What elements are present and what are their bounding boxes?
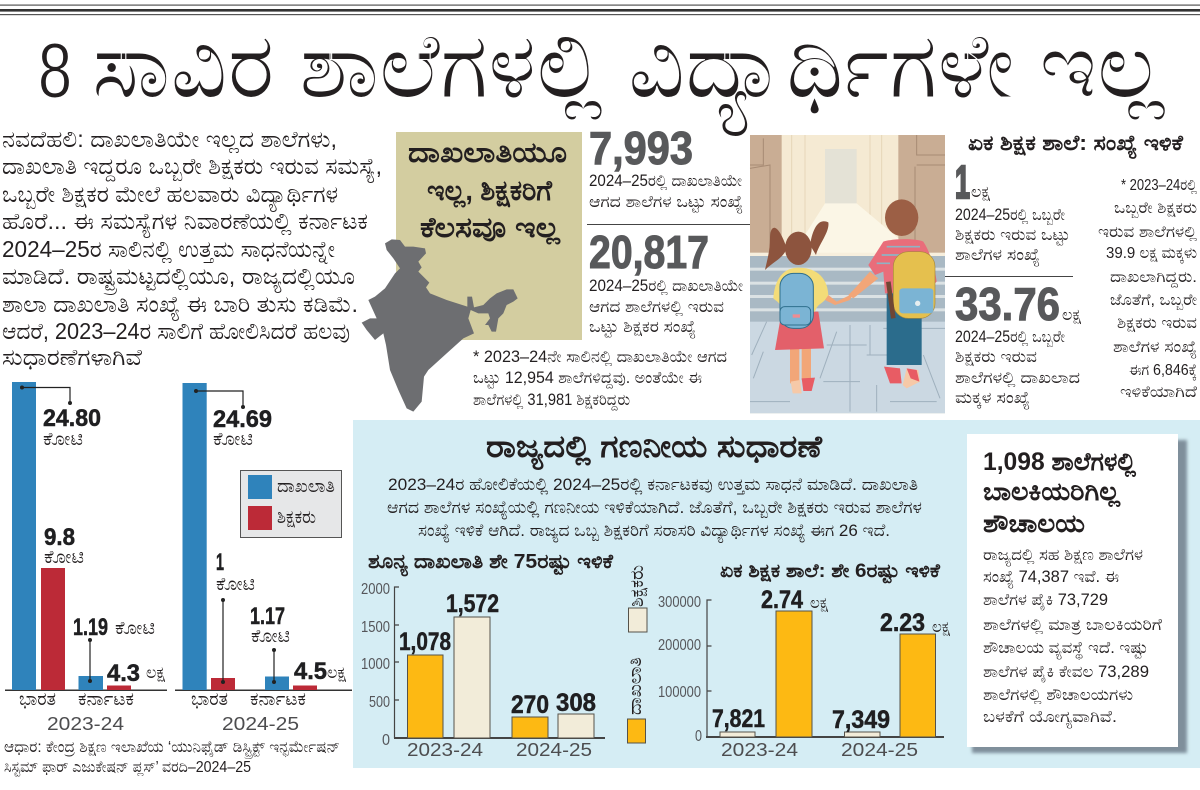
category and year labels: 2023-24 <box>47 714 124 734</box>
footnote: 2023-24 zero enrolment: ಒಟ್ಟು 12,954 ಶಾಲೆಗಳಿದ್ದವು. ಅಂತೆಯೇ ಈ <box>473 369 703 389</box>
callout body: ಶಾಲೆಗಳ ಪೈಕಿ 73,729 <box>983 591 1108 610</box>
chart: national and state enrolment and teachers <box>5 382 352 734</box>
stat: teachers in zero enrolment schools: ಆಗದ ಶಾಲೆಗಳಲ್ಲಿ ಇರುವ <box>589 298 724 317</box>
value labels 2024-25: 4.5 <box>294 658 327 685</box>
stat: 1 lakh schools: ಶಾಲೆಗಳ ಸಂಖ್ಯೆ <box>955 246 1040 266</box>
value labels 2023-24: ಲಕ್ಷ <box>146 663 166 683</box>
intro text block: ಒಬ್ಬರೇ ಶಿಕ್ಷಕರ ಮೇಲೆ ಹಲವಾರು ವಿದ್ಯಾರ್ಥಿಗಳ <box>2 181 338 212</box>
side note: 2023-24 single teacher schools: ಜೊತೆಗೆ, ಒಬ್ಬರೇ <box>1110 292 1197 310</box>
category and year labels: ಕರ್ನಾಟಕ <box>78 689 134 709</box>
legend: enrolment and teachers <box>240 470 342 538</box>
intro text block: ಮಾಡಿದೆ. ರಾಷ್ಟ್ರಮಟ್ಟದಲ್ಲಿಯೂ, ರಾಜ್ಯದಲ್ಲಿಯೂ <box>2 263 355 295</box>
side note: 2023-24 single teacher schools: ಶಾಲೆಗಳ ಸಂಖ್ಯೆ <box>1113 339 1197 358</box>
icon: india map <box>362 239 518 412</box>
bars <box>720 611 936 737</box>
value labels 2024-25: ಕೋಟಿ <box>216 574 255 594</box>
intro text block: ಆದರೆ, 2023–24ರ ಸಾಲಿಗೆ ಹೋಲಿಸಿದರೆ ಹಲವು <box>2 318 350 344</box>
callout body <box>983 546 1162 728</box>
stat: teachers in zero enrolment schools: ಒಟ್ಟು ಶಿಕ್ಷಕರ ಸಂಖ್ಯೆ <box>589 318 696 338</box>
callout heading <box>983 448 1137 538</box>
stat: 1 lakh schools: 2024–25ರಲ್ಲಿ ಒಬ್ಬರೇ <box>955 206 1065 225</box>
stat: 1 lakh schools <box>955 156 1070 266</box>
value labels <box>712 586 950 734</box>
panel heading: ರಾಜ್ಯದಲ್ಲಿ ಗಣನೀಯ ಸುಧಾರಣೆ <box>486 429 823 470</box>
category and year labels: 2024-25 <box>222 714 299 734</box>
value labels 2023-24: 24.80 <box>43 405 101 432</box>
panel: girls toilets callout <box>967 434 1187 753</box>
year labels: 2024-25 <box>841 740 918 760</box>
title: 8 <box>38 26 72 114</box>
panel: no enrolment heading box <box>396 132 582 340</box>
intro text block <box>2 126 382 370</box>
callout body: ರಾಜ್ಯದಲ್ಲಿ ಸಹ ಶಿಕ್ಷಣ ಶಾಲೆಗಳ <box>983 546 1143 566</box>
side note: 2023-24 single teacher schools: ಇರುವ ಶಾಲೆಗಳಲ್ಲಿ <box>1098 224 1197 242</box>
panel paragraph: ಆಗದ ಶಾಲೆಗಳ ಸಂಖ್ಯೆಯಲ್ಲಿ ಗಣನೀಯ ಇಳಿಕೆಯಾಗಿದೆ. ಜೊತೆಗೆ, ಒಬ್ಬರೇ ಶಿಕ್ಷಕರು ಇರುವ ಶಾಲೆಗಳ <box>387 498 922 520</box>
value labels 2023-24: 1.19 <box>73 614 108 641</box>
y axis: 1500 <box>361 619 390 636</box>
callout heading: 1,098 ಶಾಲೆಗಳಲ್ಲಿ <box>983 448 1137 478</box>
side note: 2023-24 single teacher schools: ಶಿಕ್ಷಕರು ಇರುವ <box>1117 315 1197 332</box>
legend: vertical chart key: ಶಿಕ್ಷಕರು <box>627 565 648 607</box>
leader lines <box>20 386 276 684</box>
value labels: 308 <box>556 689 596 717</box>
source note: ಸಿಸ್ಟಮ್ ಫಾರ್ ಎಜುಕೇಷನ್ ಪ್ಲಸ್’ ವರದಿ–2024–25 <box>4 759 251 777</box>
value labels 2023-24: ಕೋಟಿ <box>44 547 84 567</box>
value labels 2023-24 <box>43 405 166 687</box>
stat: zero enrolment schools: ಆಗದ ಶಾಲೆಗಳ ಒಟ್ಟು ಸಂಖ್ಯೆ <box>589 193 743 213</box>
year labels: 2023-24 <box>721 740 798 760</box>
girl <box>765 221 853 393</box>
y axis: 2000 <box>361 581 390 598</box>
value labels: 1,572 <box>446 590 499 618</box>
stat: 1 lakh schools: ಶಿಕ್ಷಕರು ಇರುವ ಒಟ್ಟು <box>955 226 1070 246</box>
callout body: ಶಾಲೆಗಳ ಪೈಕಿ ಕೇವಲ 73,289 <box>983 663 1149 682</box>
side note: 2023-24 single teacher schools: 39.9 ಲಕ್ಷ ಮಕ್ಕಳು <box>1106 245 1197 263</box>
intro text block: ಹೊರೆ... ಈ ಸಮಸ್ಯೆಗಳ ನಿವಾರಣೆಯಲ್ಲಿ ಕರ್ನಾಟಕ <box>2 208 368 238</box>
intro text block: 2024–25ರ ಸಾಲಿನಲ್ಲಿ ಉತ್ತಮ ಸಾಧನೆಯನ್ನೇ <box>2 236 335 264</box>
stat: 33.76 lakh children <box>955 278 1082 409</box>
value labels 2024-25: 24.69 <box>213 406 272 433</box>
callout body: ಬಳಕೆಗೆ ಯೋಗ್ಯವಾಗಿವೆ. <box>983 708 1117 728</box>
legend: vertical chart key <box>625 565 648 743</box>
side note: 2023-24 single teacher schools <box>1098 177 1197 401</box>
value labels: 7,349 <box>832 706 890 734</box>
value labels: 1,078 <box>399 628 451 656</box>
side note: 2023-24 single teacher schools: ಇಳಿಕೆಯಾಗಿದೆ <box>1120 384 1197 401</box>
chart heading: ಏಕ ಶಿಕ್ಷಕ ಶಾಲೆ: ಶೇ 6ರಷ್ಟು ಇಳಿಕೆ <box>720 561 941 585</box>
callout heading: ಬಾಲಕಿಯರಿಗಿಲ್ಲ <box>983 478 1121 508</box>
value labels 2023-24: 9.8 <box>44 524 75 551</box>
stat: 1 lakh schools: 1 <box>955 156 970 208</box>
value labels 2023-24: 4.3 <box>107 660 140 687</box>
callout body: ಶಾಲೆಗಳಲ್ಲಿ ಮಾತ್ರ ಬಾಲಕಿಯರಿಗೆ <box>983 616 1162 635</box>
y axis: 0 <box>695 728 702 745</box>
panel: no enrolment heading box: ಕೆಲಸವೂ ಇಲ್ಲ <box>420 212 561 245</box>
bars 2023-24 <box>12 382 131 690</box>
stat: 1 lakh schools: ಲಕ್ಷ <box>971 183 991 202</box>
y axis <box>658 594 944 745</box>
stat: 33.76 lakh children: ಶಿಕ್ಷಕರು ಇರುವ <box>955 348 1037 367</box>
intro text block: ನವದೆಹಲಿ: ದಾಖಲಾತಿಯೇ ಇಲ್ಲದ ಶಾಲೆಗಳು, <box>2 126 337 153</box>
callout heading: ಶೌಚಾಲಯ <box>983 510 1085 538</box>
value labels: ಲಕ್ಷ <box>932 619 950 636</box>
stat: 33.76 lakh children: ಶಾಲೆಗಳಲ್ಲಿ ದಾಖಲಾದ <box>955 369 1080 388</box>
legend: vertical chart key: ದಾಖಲಾತಿ <box>625 657 645 715</box>
footnote: 2023-24 zero enrolment: ಶಾಲೆಗಳಲ್ಲಿ 31,981 ಶಿಕ್ಷಕರಿದ್ದರು <box>473 391 630 411</box>
value labels 2024-25: 1 <box>216 549 224 576</box>
source note <box>4 739 340 777</box>
heading: single teacher schools: ಏಕ ಶಿಕ್ಷಕ ಶಾಲೆ: ಸಂಖ್ಯೆ ಇಳಿಕೆ <box>968 132 1184 159</box>
panel paragraph: 2023–24ರ ಹೋಲಿಕೆಯಲ್ಲಿ 2024–25ರಲ್ಲಿ ಕರ್ನಾಟಕವು ಉತ್ತಮ ಸಾಧನೆ ಮಾಡಿದೆ. ದಾಖಲಾತಿ <box>388 475 918 495</box>
category and year labels <box>19 689 306 734</box>
stat: teachers in zero enrolment schools: 20,817 <box>589 226 709 278</box>
year labels <box>721 740 918 760</box>
bars 2024-25 <box>182 383 317 690</box>
y axis: 0 <box>382 732 390 749</box>
value labels: 7,821 <box>712 705 765 733</box>
callout body: ಶಾಲೆಗಳಲ್ಲಿ ಶೌಚಾಲಯಗಳು <box>983 686 1133 705</box>
chart: single teacher schools <box>658 561 950 760</box>
callout body: ಶೌಚಾಲಯ ವ್ಯವಸ್ಥೆ ಇದೆ. ಇಷ್ಟು <box>983 639 1148 661</box>
legend: enrolment and teachers: ಶಿಕ್ಷಕರು <box>277 507 316 528</box>
stat: 33.76 lakh children: ಲಕ್ಷ <box>1062 306 1082 325</box>
intro text block: ಸುಧಾರಣೆಗಳಾಗಿವೆ <box>2 344 142 370</box>
title: ಸಾವಿರ ಶಾಲೆಗಳಲ್ಲಿ ವಿದ್ಯಾರ್ಥಿಗಳೇ ಇಲ್ಲ <box>92 15 1165 137</box>
year labels: 2023-24 <box>407 740 483 760</box>
value labels: 2.74 <box>761 586 803 614</box>
value labels 2023-24: ಕೋಟಿ <box>43 429 83 449</box>
callout body: ಸಂಖ್ಯೆ 74,387 ಇವೆ. ಈ <box>983 568 1120 588</box>
panel: state improvement <box>353 420 1200 768</box>
value labels 2023-24: ಕೋಟಿ <box>115 618 155 638</box>
category and year labels: ಕರ್ನಾಟಕ <box>250 689 306 709</box>
bars <box>408 617 594 738</box>
intro text block: ಶಾಲಾ ದಾಖಲಾತಿ ಸಂಖ್ಯೆ ಈ ಬಾರಿ ತುಸು ಕಡಿಮೆ. <box>2 291 358 321</box>
y axis: 300000 <box>658 594 701 611</box>
value labels 2024-25 <box>213 406 347 685</box>
y axis <box>361 581 605 749</box>
panel paragraph: ಸಂಖ್ಯೆ ಇಳಿಕೆ ಆಗಿದೆ. ರಾಜ್ಯದ ಒಬ್ಬ ಶಿಕ್ಷಕರಿಗೆ ಸರಾಸರಿ ವಿದ್ಯಾರ್ಥಿಗಳ ಸಂಖ್ಯೆ ಈಗ 26 ಇದೆ. <box>418 521 890 543</box>
chart: zero enrolment schools <box>361 551 614 760</box>
panel: no enrolment heading box: ಇಲ್ಲ, ಶಿಕ್ಷಕರಿಗೆ <box>427 175 553 208</box>
chart heading: ಶೂನ್ಯ ದಾಖಲಾತಿ ಶೇ 75ರಷ್ಟು ಇಳಿಕೆ <box>368 551 614 577</box>
y axis: 100000 <box>658 684 701 701</box>
stat: teachers in zero enrolment schools <box>589 226 743 338</box>
value labels: 270 <box>511 691 549 719</box>
panel paragraph <box>387 475 922 543</box>
intro text block: ದಾಖಲಾತಿ ಇದ್ದರೂ ಒಬ್ಬರೇ ಶಿಕ್ಷಕರು ಇರುವ ಸಮಸ್ಯೆ, <box>2 153 382 183</box>
y axis: 500 <box>369 694 390 711</box>
value labels 2024-25: ಕೋಟಿ <box>251 626 290 646</box>
stat: zero enrolment schools: 2024–25ರಲ್ಲಿ ದಾಖಲಾತಿಯೇ <box>589 172 742 191</box>
value labels <box>399 590 596 719</box>
year labels: 2024-25 <box>516 740 592 760</box>
footnote: 2023-24 zero enrolment: * 2023–24ನೇ ಸಾಲಿನಲ್ಲಿ ದಾಖಲಾತಿಯೇ ಆಗದ <box>473 348 727 367</box>
value labels 2024-25: 1.17 <box>250 603 285 630</box>
category and year labels: ಭಾರತ <box>191 689 228 709</box>
stat: zero enrolment schools: 7,993 <box>589 122 693 174</box>
category and year labels: ಭಾರತ <box>19 689 56 709</box>
year labels <box>407 740 592 760</box>
value labels 2024-25: ಕೋಟಿ <box>213 429 253 449</box>
boy <box>848 199 937 388</box>
source note: ಆಧಾರ: ಕೇಂದ್ರ ಶಿಕ್ಷಣ ಇಲಾಖೆಯ ‘ಯುನಿಫೈಡ್ ಡಿಸ್ಟ್ರಿಕ್ಟ್ ಇನ್ಫರ್ಮೇಷನ್ <box>4 739 340 760</box>
side note: 2023-24 single teacher schools: ದಾಖಲಾಗಿದ್ದರು. <box>1110 269 1197 288</box>
side note: 2023-24 single teacher schools: ಒಬ್ಬರೇ ಶಿಕ್ಷಕರು <box>1114 200 1197 218</box>
stat: 33.76 lakh children: 33.76 <box>955 278 1060 330</box>
stat: zero enrolment schools <box>589 122 743 213</box>
value labels 2024-25: ಲಕ್ಷ <box>327 663 347 683</box>
stat: 33.76 lakh children: 2024–25ರಲ್ಲಿ ಒಬ್ಬರೇ <box>955 328 1065 347</box>
panel: no enrolment heading box: ದಾಖಲಾತಿಯೂ <box>408 137 567 168</box>
y axis: 1000 <box>361 656 390 673</box>
legend: enrolment and teachers: ದಾಖಲಾತಿ <box>277 476 335 496</box>
stat: teachers in zero enrolment schools: 2024–25ರಲ್ಲಿ ದಾಖಲಾತಿಯೇ <box>589 277 743 296</box>
stat: 33.76 lakh children: ಮಕ್ಕಳ ಸಂಖ್ಯೆ <box>955 389 1030 409</box>
y axis: 200000 <box>658 637 701 654</box>
value labels: 2.23 <box>880 609 925 637</box>
footnote: 2023-24 zero enrolment <box>473 348 727 411</box>
illustration: two children walking to school <box>750 135 945 413</box>
value labels: ಲಕ್ಷ <box>810 595 828 612</box>
